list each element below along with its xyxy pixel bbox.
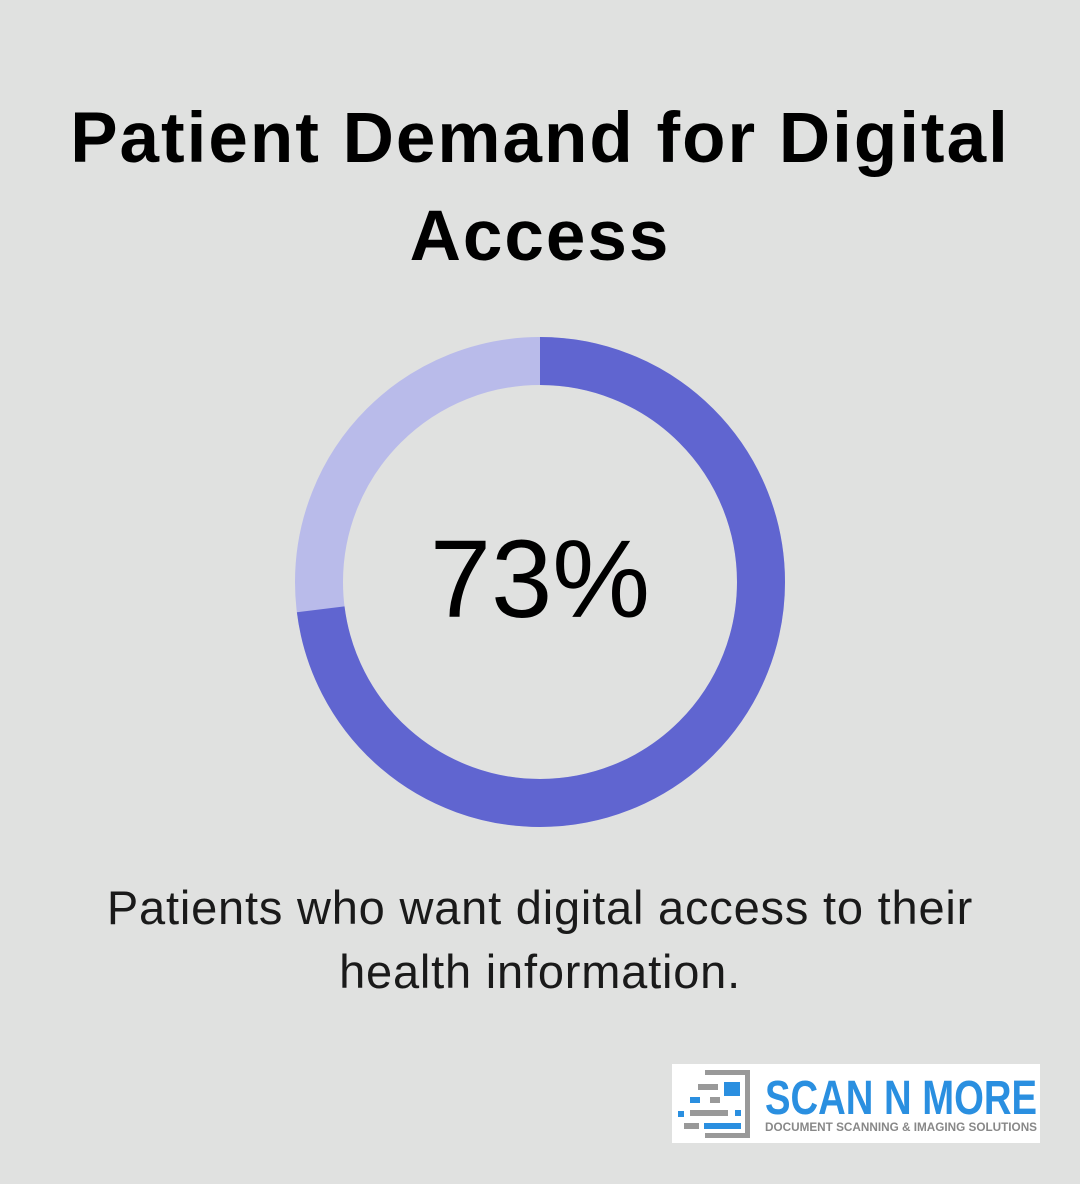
donut chart: [295, 337, 785, 827]
title: Patient Demand for Digital: [70, 99, 1010, 178]
caption: [107, 881, 973, 998]
donut chart: 73%: [430, 518, 650, 641]
caption: health information.: [339, 945, 741, 998]
caption: Patients who want digital access to their: [107, 881, 973, 934]
logo: DOCUMENT SCANNING & IMAGING SOLUTIONS: [765, 1120, 1037, 1134]
title: [70, 99, 1010, 276]
title: Access: [410, 197, 670, 276]
logo: [672, 1064, 1040, 1143]
